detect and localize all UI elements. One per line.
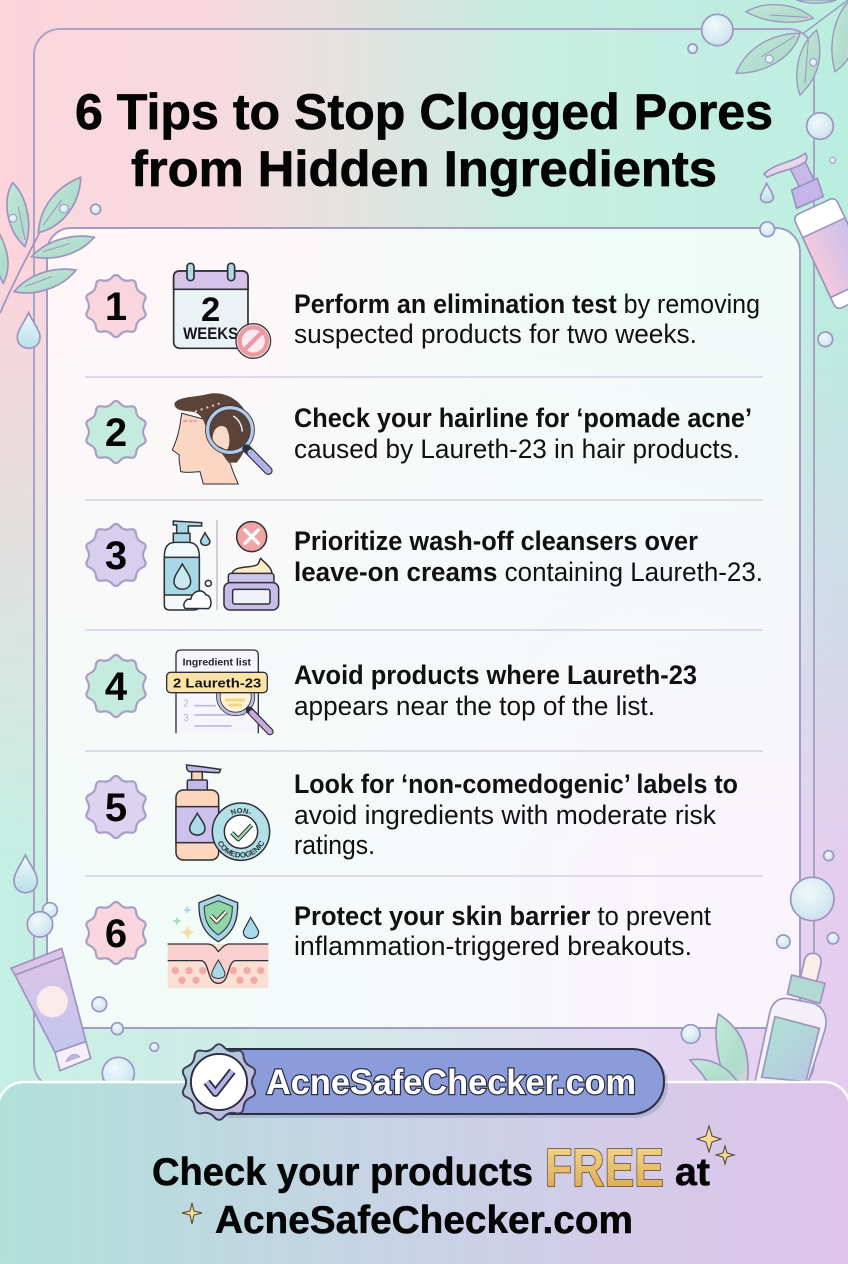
tip 5 text xyxy=(294,769,738,860)
row separators xyxy=(85,377,763,876)
decoration: top-left leaves and drop xyxy=(0,177,101,348)
FREE gold highlight: FREE xyxy=(545,1138,664,1198)
number badge 5 xyxy=(86,776,146,838)
icon: pump bottle with non-comedogenic seal: NON- xyxy=(230,808,251,815)
decoration: top-right bubbles and pump bottle xyxy=(688,14,848,347)
tip 3 text: leave-on creams containing Laureth-23. xyxy=(294,557,763,587)
tip 6 text xyxy=(294,901,712,961)
icon: ingredient list with magnifier: 2 Laureth-23 xyxy=(173,675,261,690)
tip 6 text: inflammation-triggered breakouts. xyxy=(294,931,692,961)
tip 2 text: caused by Laureth-23 in hair products. xyxy=(294,434,740,464)
call to action text xyxy=(152,1138,710,1242)
number badge 1: 1 xyxy=(105,285,127,329)
tip 5 text: avoid ingredients with moderate risk xyxy=(294,800,717,830)
title: from Hidden Ingredients xyxy=(131,141,717,197)
tip 6 text: Protect your skin barrier to prevent xyxy=(294,901,712,931)
tip 2 text: Check your hairline for ‘pomade acne’ xyxy=(294,403,752,433)
tip 1 text: Perform an elimination test by removing xyxy=(294,289,760,319)
number badge 1 xyxy=(86,275,146,337)
icon: pump bottle with non-comedogenic seal: COMEDOGENIC xyxy=(218,840,264,858)
icon: ingredient list with magnifier: Ingredient list xyxy=(183,658,252,669)
footer panel xyxy=(0,1082,848,1264)
number badge 2 xyxy=(86,401,146,463)
decoration: bottom-left tube and bubbles xyxy=(11,855,159,1089)
tip 5 text: Look for ‘non-comedogenic’ labels to xyxy=(294,769,738,799)
icon: check badge xyxy=(183,1044,255,1120)
number badge 3: 3 xyxy=(105,534,127,578)
icon: gold sparkles xyxy=(182,1126,734,1224)
number badge 4 xyxy=(86,655,146,717)
number badge 6 xyxy=(86,902,146,964)
title xyxy=(75,84,773,197)
tip 5 xyxy=(85,764,738,862)
call to action text: AcneSafeChecker.com xyxy=(215,1199,633,1242)
tip 4 text: Avoid products where Laureth-23 xyxy=(294,660,697,690)
tip 1 text xyxy=(294,289,760,349)
icon: cleanser versus cream jar xyxy=(164,520,279,610)
icon: calendar 2 weeks xyxy=(174,263,271,358)
icon: calendar 2 weeks: 2 xyxy=(201,291,220,329)
icon: ingredient list with magnifier xyxy=(167,650,270,733)
icon: shield and skin barrier xyxy=(168,895,268,988)
tip 4 text xyxy=(294,660,697,721)
call to action text: Check your products xyxy=(152,1151,533,1194)
call to action text: at xyxy=(675,1151,710,1194)
icon: calendar 2 weeks: WEEKS xyxy=(183,324,238,343)
number badge 4: 4 xyxy=(105,665,128,709)
tip 2 xyxy=(86,393,752,484)
title: 6 Tips to Stop Clogged Pores xyxy=(75,84,773,140)
number badge 5: 5 xyxy=(105,786,127,830)
tip 3 text xyxy=(294,526,763,587)
tip 1 xyxy=(86,263,760,358)
website pill button: AcneSafeChecker.com xyxy=(266,1063,636,1102)
outer frame xyxy=(34,29,814,1089)
icon: pump bottle with non-comedogenic seal xyxy=(175,764,270,862)
tip 2 text xyxy=(294,403,752,464)
website pill button xyxy=(183,1044,668,1120)
tip 6 xyxy=(86,895,712,988)
tip 5 text: ratings. xyxy=(294,830,375,860)
decoration: top-right leaves xyxy=(736,0,848,95)
tip 4 text: appears near the top of the list. xyxy=(294,691,655,721)
tip 4 xyxy=(86,650,697,733)
icon: ingredient list with magnifier: 3 xyxy=(183,713,189,724)
tip 3 xyxy=(86,520,763,610)
tip 1 text: suspected products for two weeks. xyxy=(294,319,697,349)
number badge 2: 2 xyxy=(105,411,127,455)
icon: head with magnifier xyxy=(172,393,268,484)
icon: ingredient list with magnifier: 2 xyxy=(183,699,189,710)
number badge 6: 6 xyxy=(105,912,127,956)
main tips card xyxy=(47,228,800,1028)
decoration: bottom-right dropper bottle, bubbles and leaves xyxy=(681,851,839,1087)
number badge 3 xyxy=(86,524,146,586)
tip 3 text: Prioritize wash-off cleansers over xyxy=(294,526,698,556)
